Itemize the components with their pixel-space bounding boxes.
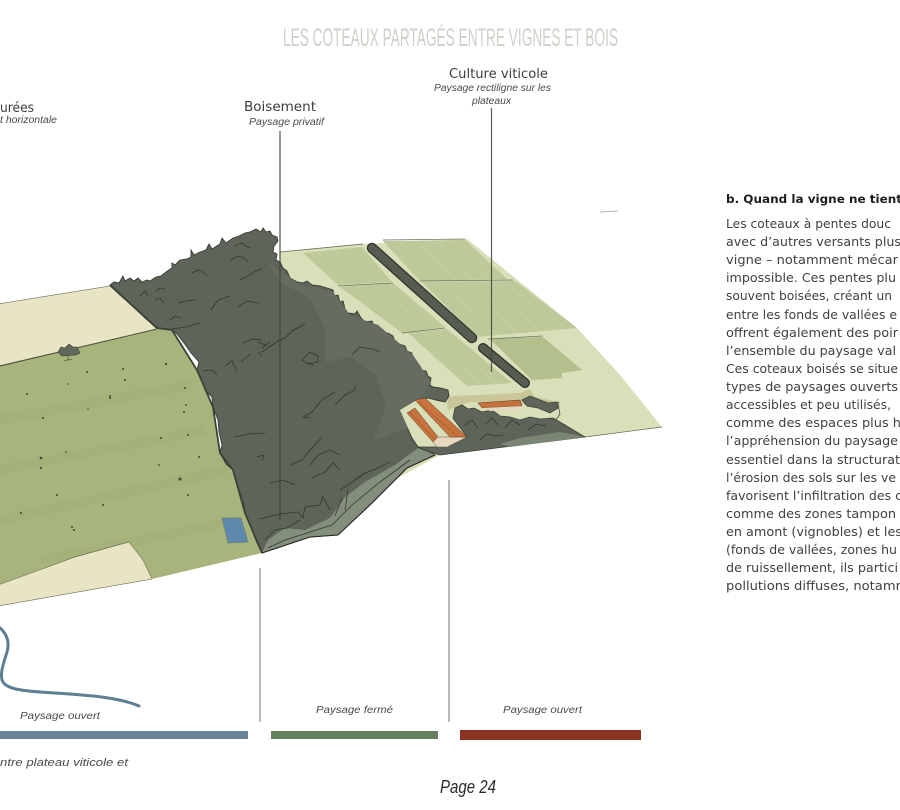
section heading: b. Quand la vigne ne tient <box>726 192 900 206</box>
paragraph: essentiel dans la structurat <box>726 452 900 467</box>
paragraph: offrent également des poir <box>726 325 899 340</box>
river <box>0 628 139 706</box>
paragraph: l’ensemble du paysage val <box>726 343 896 358</box>
vineyard parcels <box>303 239 582 386</box>
open landscape bar, river side <box>0 710 248 739</box>
separator lines <box>260 480 449 722</box>
paragraph: comme des zones tampon <box>726 506 896 521</box>
paragraph: comme des espaces plus h <box>726 415 900 430</box>
woodland <box>110 228 449 553</box>
closed landscape bar <box>271 704 438 739</box>
landscape block diagram <box>0 211 662 606</box>
open landscape bar, plateau side <box>460 704 641 740</box>
paragraph: (fonds de vallées, zones hu <box>726 542 897 557</box>
caption: ntre plateau viticole et <box>0 757 129 769</box>
title: LES COTEAUX PARTAGÉS ENTRE VIGNES ET BOIS <box>283 23 618 52</box>
callout: cultures label: t horizontale <box>0 115 57 126</box>
paragraph: Les coteaux à pentes douc <box>726 216 891 231</box>
paragraph: l’appréhension du paysage <box>726 433 898 448</box>
paragraph: avec d’autres versants plus <box>726 234 900 249</box>
lone tree <box>58 344 80 361</box>
closed landscape bar: Paysage fermé <box>316 704 393 716</box>
callout: boisement <box>244 100 325 520</box>
callout: cultures label <box>0 101 57 126</box>
water basin <box>222 518 248 543</box>
lower woodland near farm <box>417 396 585 455</box>
callout: boisement: Paysage privatif <box>249 117 325 128</box>
farm buildings <box>407 398 522 447</box>
callout: culture viticole: Culture viticole <box>449 67 548 82</box>
hedgerows <box>372 248 525 383</box>
plateau land <box>260 239 662 553</box>
farm track <box>446 389 560 410</box>
tree scribbles <box>140 243 410 548</box>
callout: culture viticole <box>434 67 551 372</box>
green pasture <box>0 329 262 585</box>
paragraph: types de paysages ouverts <box>726 379 898 394</box>
callout: culture viticole: plateaux <box>471 96 512 107</box>
paragraph: favorisent l’infiltration des c <box>726 488 900 503</box>
woodland slope foot <box>262 448 435 553</box>
small stroke above plateau <box>600 211 618 212</box>
paragraph <box>726 216 900 593</box>
cream field bottom left <box>0 542 152 606</box>
paragraph: entre les fonds de vallées e <box>726 307 897 322</box>
callout: cultures label: urées <box>0 101 34 116</box>
cream field top left <box>0 286 157 366</box>
paragraph: accessibles et peu utilisés, <box>726 397 891 412</box>
lighter canopy zone <box>268 262 431 445</box>
open landscape bar, plateau side: Paysage ouvert <box>503 704 583 716</box>
paragraph: en amont (vignobles) et les <box>726 524 900 539</box>
scattered trees in pasture <box>20 363 200 531</box>
paragraph: souvent boisées, créant un <box>726 288 892 303</box>
callout: boisement: Boisement <box>244 100 316 115</box>
paragraph: pollutions diffuses, notamr <box>726 578 900 593</box>
paragraph: Ces coteaux boisés se situe <box>726 361 898 376</box>
page number: Page 24 <box>440 777 496 797</box>
body text column <box>726 192 900 593</box>
thick left wood edge <box>110 285 262 553</box>
paragraph: impossible. Ces pentes plu <box>726 270 896 285</box>
callout: culture viticole: Paysage rectiligne sur les <box>434 83 551 94</box>
paragraph: de ruissellement, ils partici <box>726 560 898 575</box>
paragraph: l’érosion des sols sur les ve <box>726 470 896 485</box>
open landscape bar, river side: Paysage ouvert <box>20 710 101 722</box>
paragraph: vigne – notamment mécar <box>726 252 899 267</box>
